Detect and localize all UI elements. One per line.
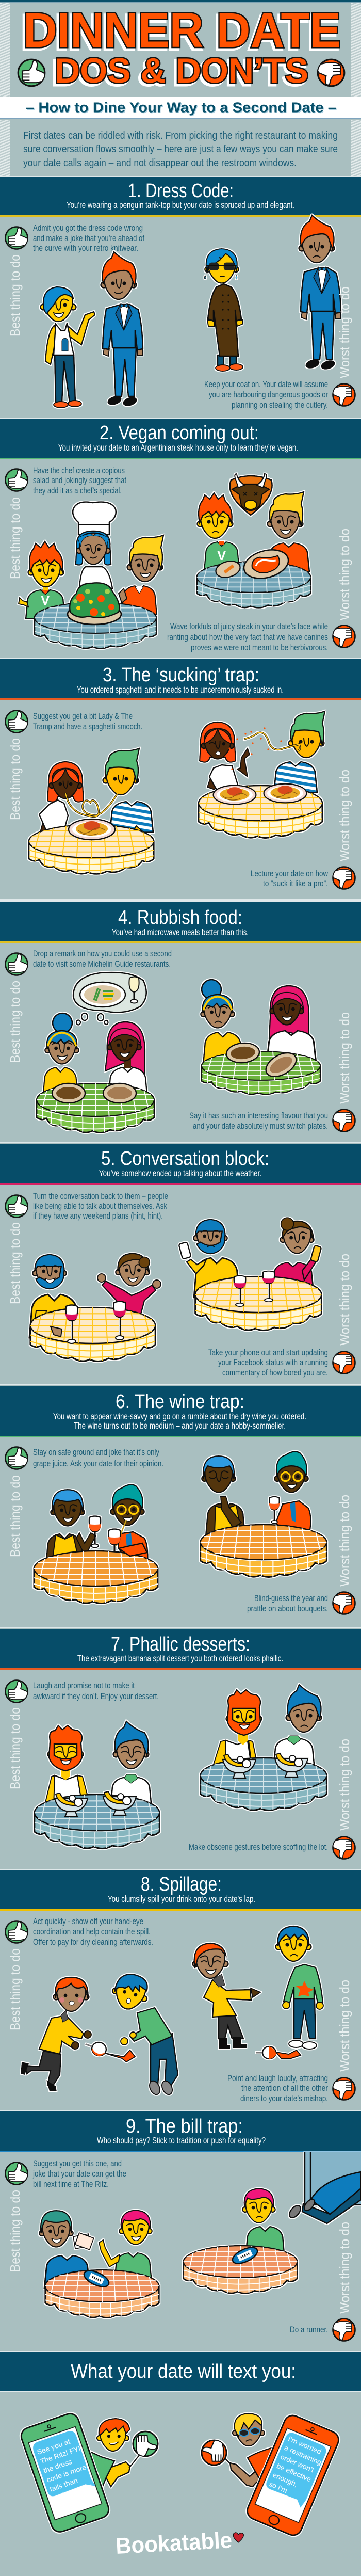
title: Dos and Don'ts: DOS & DON’TS — [55, 51, 308, 90]
illustration: switching plates — [201, 980, 320, 1097]
section 3: best advice — [5, 710, 142, 820]
section 7: worst advice: Worst thing to do — [337, 1739, 352, 1831]
section 2: worst advice: Wave forkfuls of juicy steak in your date’s face while — [170, 622, 328, 631]
illustration: happy conversation — [29, 1254, 161, 1365]
section 8: best advice: Best thing to do — [7, 1948, 23, 2030]
logo: Bookatable: Bookatable — [115, 2527, 233, 2559]
section 4 banner: You’ve had microwave meals better than this. — [112, 927, 249, 937]
section 9: best advice: bill next time at The Ritz. — [33, 2180, 109, 2189]
section 7 banner: The extravagant banana split dessert you both ordered looks phallic. — [77, 1653, 283, 1663]
spaghetti sauce splatter — [228, 727, 282, 770]
phone: See you at the Ritz: code is more — [45, 2463, 87, 2484]
section 9: best advice: Best thing to do — [7, 2190, 23, 2272]
section 3: worst advice — [251, 770, 355, 889]
phone: restraining order: I’m worried — [287, 2435, 323, 2456]
section 7 banner: 7. Phallic desserts: — [111, 1634, 250, 1655]
section 2: best advice: salad and jokingly suggest that — [33, 476, 126, 485]
section 8 banner — [0, 1869, 361, 1911]
phone: restraining order: be effective — [275, 2461, 313, 2484]
section 3: worst advice: Worst thing to do — [337, 770, 352, 861]
illustration: bull head and steak: V — [217, 548, 226, 563]
section 4: worst advice: Say it has such an interesting flavour that you — [189, 1111, 328, 1121]
phone: restraining order: a restraining — [283, 2443, 323, 2467]
section 2: best advice: Best thing to do — [7, 497, 23, 579]
section 7: best advice: Laugh and promise not to make it — [33, 1681, 135, 1690]
section 5: best advice: if they have any weekend plans (hint, hint). — [33, 1211, 163, 1221]
section 4: worst advice: and your date absolutely must switch plates. — [193, 1122, 328, 1131]
section 5: best advice — [5, 1192, 168, 1304]
section 4: best advice: Best thing to do — [7, 981, 23, 1063]
section 9: best advice: Suggest you get this one, and — [33, 2159, 122, 2168]
section 3 banner: You ordered spaghetti and it needs to be unceremoniously sucked in. — [77, 684, 284, 695]
section 8: worst advice: the attention of all the other — [241, 2084, 328, 2093]
section 5: worst advice — [208, 1254, 355, 1378]
section 6: worst advice: Blind-guess the year and — [254, 1594, 328, 1603]
illustration: obscene gestures with dessert — [201, 1685, 326, 1814]
good text: green phone and person — [19, 2411, 158, 2534]
illustration: chef with salad — [19, 502, 163, 652]
section 6: worst advice — [247, 1495, 355, 1614]
title: Dos and Don'ts: DOS & DON’TS — [53, 53, 306, 92]
section 5 banner: 5. Conversation block: — [101, 1148, 269, 1170]
phone: See you at the Ritz: See you at — [36, 2437, 71, 2456]
section 3 banner: 3. The ‘sucking’ trap: — [103, 664, 259, 686]
section 7: best advice: awkward if they don’t. Enjoy your dessert. — [33, 1692, 159, 1701]
section 5 banner — [0, 1142, 361, 1185]
phone: See you at the Ritz — [19, 2411, 111, 2534]
section 2: worst advice: ranting about how the very fact that we have canines — [167, 633, 328, 642]
phone: restraining order — [244, 2413, 341, 2538]
bad text: orange phone and person — [202, 2413, 341, 2538]
section 2: best advice: they add it as a chef’s special. — [33, 486, 122, 495]
illustration: two women with rubbish food — [37, 1013, 154, 1137]
illustration: wine snob — [201, 1451, 326, 1581]
header panel — [0, 0, 361, 176]
section 4: best advice — [5, 949, 172, 1063]
section 2: best advice — [5, 466, 126, 579]
section 2 banner — [0, 418, 361, 459]
illustration: chef with salad: V — [41, 593, 50, 608]
section 8 banner: You clumsily spill your drink onto your date’s lap. — [108, 1894, 255, 1904]
illustration: window and runner — [287, 2152, 361, 2223]
section 2 banner: 2. Vegan coming out: — [100, 422, 259, 444]
section 5: worst advice: your Facebook status with a running — [218, 1358, 328, 1367]
section 8 banner: 8. Spillage: — [141, 1874, 222, 1895]
illustration: catching the spilt glass — [21, 1970, 178, 2096]
phone: restraining order: emigrating. — [264, 2489, 300, 2510]
section 6: best advice: Stay on safe ground and joke that it’s only — [33, 1448, 160, 1457]
section 2: worst advice — [167, 529, 355, 652]
illustration: abandoned date — [184, 2188, 297, 2297]
illustration: coat woman and frowning man — [204, 215, 341, 371]
section 2: worst advice: proves we were not meant to be herbivorous. — [191, 643, 328, 652]
section 2: worst advice: Worst thing to do — [337, 529, 352, 620]
section 7 banner — [0, 1627, 361, 1670]
section 4: worst advice — [189, 1012, 355, 1131]
illustration: bored diners on phones — [178, 1218, 321, 1334]
section 1: best advice: Admit you got the dress code wrong — [33, 223, 143, 233]
section 4: best advice: Drop a remark on how you could use a second — [33, 949, 172, 958]
section 7: best advice: Best thing to do — [7, 1707, 23, 1789]
section 4 banner — [0, 899, 361, 943]
section 1: worst advice: planning on stealing the cutlery. — [232, 401, 328, 410]
section 3: best advice: Best thing to do — [7, 738, 23, 820]
section 1: worst advice: Worst thing to do — [337, 286, 352, 378]
section 6: worst advice: Worst thing to do — [337, 1495, 352, 1587]
final banner — [0, 2351, 361, 2392]
icon: thumbs-down lollipop — [202, 2438, 226, 2465]
phone: restraining order: enough, — [272, 2471, 299, 2488]
section 8: worst advice — [227, 1980, 355, 2103]
illustration: pointing and laughing — [193, 1926, 323, 2059]
section 6: best advice: grape juice. Ask your date for their opinion. — [33, 1459, 163, 1468]
phone: See you at the Ritz: The Ritz! FYI — [39, 2444, 81, 2466]
section 7: best advice — [5, 1681, 159, 1789]
section 8: best advice: Offer to pay for dry cleaning afterwards. — [33, 1938, 153, 1947]
section 3 banner — [0, 658, 361, 700]
illustration: bull head and steak — [197, 474, 310, 611]
section 5: worst advice: Take your phone out and start updating — [208, 1348, 328, 1357]
phone: See you at the Ritz: tank-top. xxx — [52, 2482, 93, 2503]
section 2: best advice: Have the chef create a copious — [33, 466, 125, 475]
section 1: best advice: and make a joke that you’re ahead of — [33, 234, 144, 243]
section 6 banner: The wine turns out to be medium – and your date a hobby-sommelier. — [74, 1420, 286, 1431]
section 7: worst advice: Make obscene gestures before scoffing the lot. — [189, 1843, 328, 1852]
phone: restraining order: so I’m — [268, 2479, 289, 2494]
section 5: best advice: Turn the conversation back to them – people — [33, 1192, 168, 1201]
section 8: best advice — [5, 1917, 153, 2030]
section 9: best advice — [5, 2159, 126, 2272]
section 3: worst advice: to “suck it like a pro”. — [263, 879, 328, 888]
section 1: best advice: the curve with your retro knitwear. — [33, 244, 138, 253]
illustration: laughing over dessert — [35, 1721, 159, 1852]
section 7: worst advice — [189, 1739, 355, 1859]
section 6 banner: 6. The wine trap: — [116, 1391, 244, 1413]
section 5: worst advice: Worst thing to do — [337, 1254, 352, 1346]
icon: thumbs down — [315, 59, 344, 86]
section 5 banner: You’ve somehow ended up talking about the weather. — [99, 1168, 261, 1178]
section 8: best advice: coordination and help contain the spill. — [33, 1927, 151, 1937]
section 1: worst advice: Keep your coat on. Your date will assume — [204, 380, 328, 389]
section 1: worst advice: you are harbouring dangerous goods or — [209, 390, 328, 399]
section 6: best advice: Best thing to do — [7, 1475, 23, 1557]
section 3: best advice: Tramp and have a spaghetti smooch. — [33, 722, 142, 731]
section 1: best advice — [5, 223, 144, 337]
section 1: best advice: Best thing to do — [7, 254, 23, 337]
section 9: best advice: joke that your date can get the — [32, 2169, 126, 2179]
icon: thumbs-up lollipop — [133, 2431, 158, 2459]
section 9: worst advice — [290, 2222, 355, 2341]
section 1 banner — [0, 176, 361, 217]
section 3: worst advice: Lecture your date on how — [251, 869, 328, 878]
phone: restraining order: order won’t — [280, 2453, 316, 2474]
subtitle: – How to Dine Your Way to a Second Date – — [26, 99, 336, 116]
section 1 banner: 1. Dress Code: — [128, 180, 234, 202]
section 9: worst advice: Worst thing to do — [337, 2222, 352, 2314]
section 9: worst advice: Do a runner. — [290, 2325, 328, 2334]
section 8: worst advice: Point and laugh loudly, attracting — [227, 2074, 328, 2083]
section 8: best advice: Act quickly - show off your hand-eye — [33, 1917, 143, 1926]
section 6 banner — [0, 1384, 361, 1437]
section 4: worst advice: Worst thing to do — [337, 1012, 352, 1104]
section 5: best advice: Best thing to do — [7, 1222, 23, 1304]
section 8: worst advice: Worst thing to do — [337, 1980, 352, 2072]
section 6: worst advice: prattle on about bouquets. — [247, 1604, 328, 1613]
icon: thumbs up — [18, 59, 47, 86]
title: Dinner Date: DINNER DATE — [21, 5, 339, 60]
section 9 banner: 9. The bill trap: — [126, 2116, 243, 2137]
section 8: worst advice: diners to your date’s mishap. — [240, 2094, 328, 2103]
section 5: worst advice: commentary of how bored you are. — [222, 1368, 328, 1378]
illustration: noisy spaghetti eating — [199, 711, 325, 842]
section 3: best advice: Suggest you get a bit Lady & The — [33, 712, 133, 721]
section 9 banner — [0, 2110, 361, 2152]
phone: See you at the Ritz: the dress — [42, 2457, 73, 2475]
section 1: worst advice — [204, 286, 355, 410]
subtitle: – How to Dine Your Way to a Second Date – — [27, 100, 337, 116]
section 6: best advice — [5, 1447, 163, 1557]
intro text: your date calls again – and not disappear out the restroom windows. — [23, 157, 297, 169]
illustration: tank-top girl and suited man — [40, 252, 143, 408]
section 4: best advice: date to visit some Michelin Guide restaurants. — [33, 959, 171, 969]
illustration: sharing the bill — [39, 2210, 159, 2321]
final banner: What your date will text you: — [71, 2361, 296, 2382]
illustration: thought bubble of fine dining — [73, 972, 146, 1025]
section 5: best advice: like being able to talk about themselves. Ask — [33, 1202, 168, 1211]
title: Dinner Date: DINNER DATE — [23, 3, 341, 58]
intro text — [23, 130, 338, 169]
section 4 banner: 4. Rubbish food: — [118, 907, 242, 929]
phone: See you at the Ritz: tails than — [48, 2476, 79, 2493]
illustration: spaghetti smooch — [29, 748, 154, 877]
illustration: wine with a straw — [34, 1484, 158, 1607]
section 9 banner: Who should pay? Stick to tradition or push for equality? — [97, 2135, 266, 2146]
section 1 banner: You’re wearing a penguin tank-top but your date is spruced up and elegant. — [67, 200, 294, 210]
